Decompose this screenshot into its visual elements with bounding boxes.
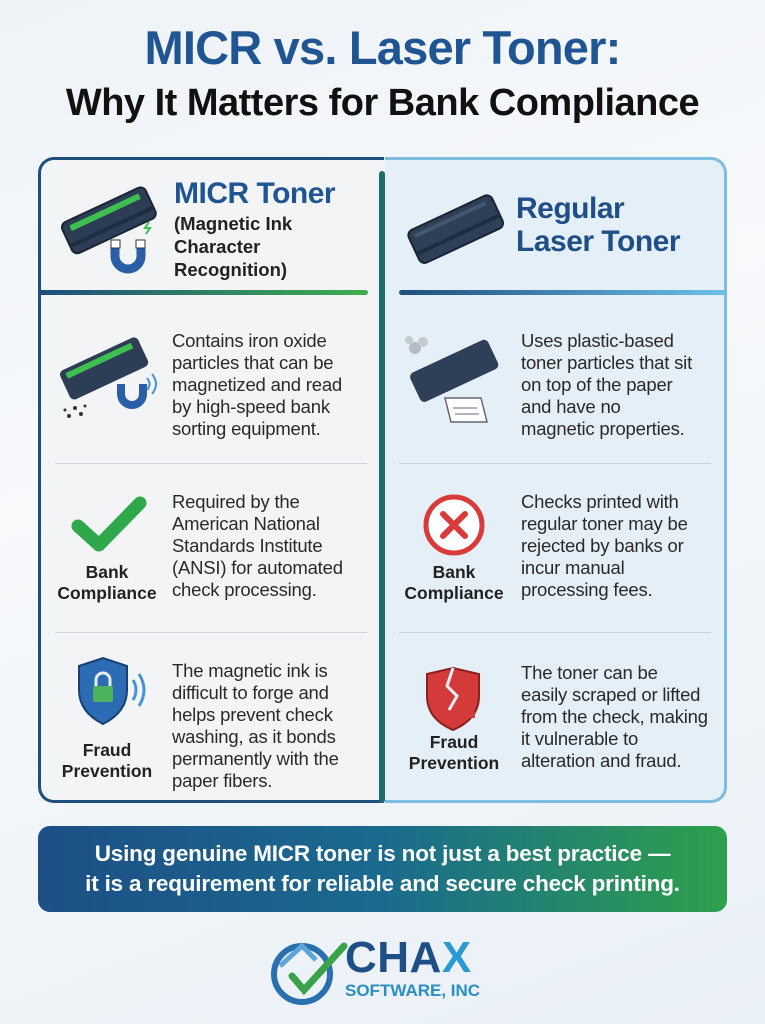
heading: MICR Toner [174, 177, 336, 280]
heading: MICR Toner: (Magnetic Ink [174, 213, 292, 234]
text [521, 491, 688, 600]
text: particles that can be [172, 352, 333, 373]
heading: MICR Toner: MICR Toner [174, 177, 335, 210]
icon: toner with paper [405, 336, 498, 423]
label: Fraud Prevention [62, 740, 152, 781]
text: and have no [521, 396, 621, 417]
text: Checks printed with [521, 491, 679, 512]
label: Bank Compliance: Bank [86, 562, 128, 582]
icon: toner with magnet [60, 337, 157, 418]
text: magnetic properties. [521, 418, 685, 439]
text: it vulnerable to [521, 728, 638, 749]
icon: logo mark [271, 942, 348, 1005]
row: fraud prevention [62, 657, 339, 791]
text: Contains iron oxide [172, 330, 327, 351]
text: alteration and fraud. [521, 750, 681, 771]
bottom banner: it is a requirement for reliable and secure check printing. [85, 871, 680, 896]
text: by high-speed bank [172, 396, 330, 417]
text: permanently with the [172, 748, 339, 769]
heading: MICR Toner: Recognition) [174, 259, 287, 280]
label: Fraud Prevention: Prevention [409, 753, 499, 773]
text: incur manual [521, 557, 625, 578]
heading: Regular Laser Toner: Laser Toner [516, 225, 680, 258]
label: Bank Compliance [404, 562, 504, 603]
divider bar [399, 290, 727, 295]
text: washing, as it bonds [172, 726, 336, 747]
logo: CHAX Software [271, 933, 480, 1005]
label: Bank Compliance: Bank [433, 562, 475, 582]
text [521, 662, 708, 771]
text: helps prevent check [172, 704, 333, 725]
text: processing fees. [521, 579, 653, 600]
icon: green check [72, 496, 146, 552]
label: Bank Compliance: Compliance [57, 583, 157, 603]
logo text: CHAX [345, 933, 472, 982]
text: easily scraped or lifted [521, 684, 700, 705]
text: from the check, making [521, 706, 708, 727]
row: plastic particles [405, 330, 692, 439]
text: check processing. [172, 579, 317, 600]
text: (ANSI) for automated [172, 557, 343, 578]
bottom banner [38, 826, 727, 912]
icon: shield with lock [78, 657, 146, 726]
text: magnetized and read [172, 374, 342, 395]
text: sorting equipment. [172, 418, 321, 439]
logo text: SOFTWARE, INC [345, 981, 480, 1000]
row: bank compliance rejected [404, 491, 688, 603]
panel: MICR toner column [38, 157, 384, 803]
title: Why It Matters for Bank Compliance [66, 82, 699, 124]
label: Bank Compliance [57, 562, 157, 603]
text: difficult to forge and [172, 682, 329, 703]
icon: red x circle [424, 494, 484, 556]
text: Uses plastic-based [521, 330, 674, 351]
text: rejected by banks or [521, 535, 684, 556]
text: regular toner may be [521, 513, 688, 534]
label: Fraud Prevention: Prevention [62, 761, 152, 781]
bottom banner: Using genuine MICR toner is not just a best practice — [95, 841, 670, 866]
label: Fraud Prevention [409, 732, 499, 773]
title: MICR vs. Laser Toner: [145, 21, 620, 74]
heading: Regular Laser Toner: Regular [516, 192, 624, 225]
text [172, 660, 339, 791]
text: on top of the paper [521, 374, 673, 395]
comparison panel [38, 157, 727, 803]
text [172, 330, 342, 439]
text: The magnetic ink is [172, 660, 328, 681]
text: Required by the [172, 491, 300, 512]
row: fraud vulnerability [409, 662, 708, 773]
text: Standards Institute [172, 535, 322, 556]
label: Fraud Prevention: Fraud [430, 732, 478, 752]
panel: regular laser toner column [385, 157, 727, 803]
text: The toner can be [521, 662, 658, 683]
divider bar [38, 290, 368, 295]
row: iron oxide [60, 330, 342, 439]
label: Fraud Prevention: Fraud [83, 740, 131, 760]
text [172, 491, 343, 600]
heading: Regular Laser Toner [516, 192, 680, 258]
text: toner particles that sit [521, 352, 692, 373]
label: Bank Compliance: Compliance [404, 583, 504, 603]
text: American National [172, 513, 320, 534]
text [521, 330, 692, 439]
logo text [345, 933, 480, 1000]
icon: MICR toner cartridge with magnet [60, 186, 157, 274]
text: paper fibers. [172, 770, 272, 791]
row: bank compliance [57, 491, 343, 603]
title [66, 21, 699, 124]
heading: MICR Toner: Character [174, 236, 260, 257]
icon: broken red shield [426, 667, 480, 732]
center divider [379, 171, 385, 803]
icon: regular toner cartridge [407, 194, 504, 264]
